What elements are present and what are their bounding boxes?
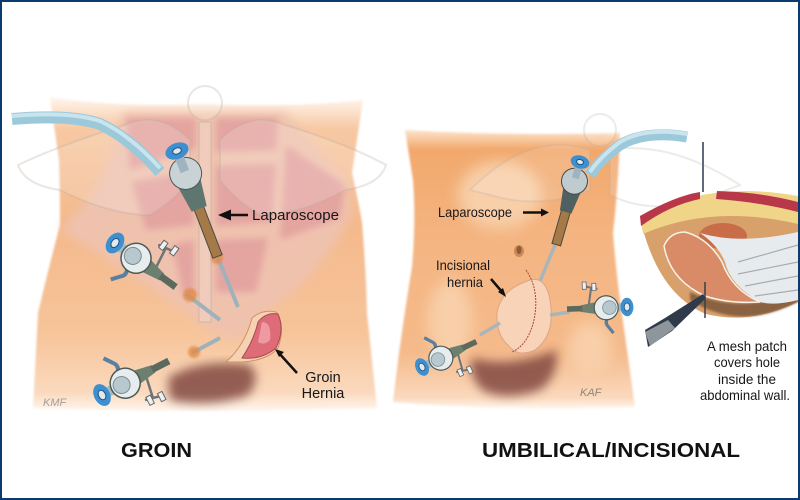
panel: umbilical/incisional illustration [393, 114, 798, 409]
icon: upper side trocar [90, 212, 195, 313]
heading: groin: GROIN [121, 440, 192, 462]
cavity interior [642, 200, 798, 318]
mesh fan [700, 232, 798, 304]
label: incisional hernia: Incisional [436, 257, 490, 273]
groin hernia bulge [226, 311, 282, 362]
icon: lower side trocar [80, 332, 184, 428]
label: incisional hernia: hernia [447, 274, 483, 290]
label: groin hernia: Hernia [302, 386, 345, 402]
inset: mesh repair [640, 142, 798, 347]
tube: right laparoscope [590, 132, 687, 175]
label: groin hernia: Groin [305, 370, 341, 386]
tube: left laparoscope [12, 114, 160, 172]
label: laparoscope right: Laparoscope [438, 204, 512, 220]
caption: mesh patch [700, 338, 790, 403]
caduceus watermark [18, 86, 386, 322]
incisional hernia bulge [497, 270, 551, 353]
incision marks [183, 252, 223, 358]
abdominal wall layers [640, 191, 798, 234]
heading: umbilical/incisional: UMBILICAL/INCISIONAL [482, 440, 740, 462]
label: groin hernia [275, 349, 345, 402]
suture needle [702, 142, 704, 192]
caption: mesh patch: abdominal wall. [700, 387, 790, 403]
mesh patch [664, 232, 760, 302]
torso: umbilical [393, 130, 635, 409]
icon: left side trocar [405, 318, 488, 394]
panel: groin illustration [12, 86, 386, 428]
label: laparoscope: Laparoscope [252, 207, 339, 224]
abdominal muscle [60, 113, 352, 340]
caption: mesh patch: inside the [718, 371, 776, 387]
caption: mesh patch: covers hole [714, 354, 780, 370]
signature mark: KMF [43, 397, 68, 409]
navel [514, 245, 524, 257]
mesh ribs [738, 245, 798, 296]
torso: groin [33, 97, 377, 411]
signature mark: KAF [580, 387, 603, 399]
pubic shading [471, 350, 557, 396]
pubic shading [168, 363, 256, 403]
forceps [645, 294, 706, 347]
icon: right side trocar [566, 280, 634, 335]
caduceus watermark [470, 114, 740, 206]
skin highlights [428, 161, 612, 378]
icon: laparoscope trocar right [544, 152, 594, 248]
caption: mesh patch: A mesh patch [707, 338, 787, 354]
needle shafts: groin [186, 258, 238, 353]
label: incisional hernia [436, 257, 506, 297]
hole in wall [699, 223, 747, 249]
needle shafts: umbilical [480, 245, 570, 335]
icon: laparoscope trocar [159, 138, 232, 262]
